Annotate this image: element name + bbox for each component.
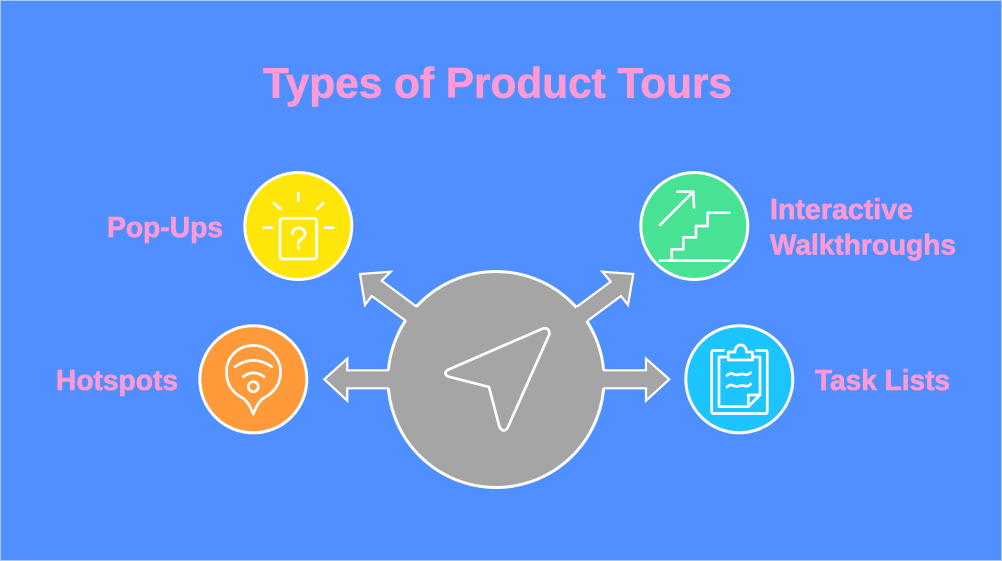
icon: wifi location pin [226,346,280,414]
label: interactive walkthroughs [770,194,956,262]
node: hotspots [200,326,307,433]
node: task lists [686,326,793,433]
node: pop-ups [245,172,352,280]
label: interactive walkthroughs: Walkthroughs [770,230,956,262]
arrow: to interactive walkthroughs [574,272,633,322]
label: pop-ups: Pop-Ups [107,212,223,244]
node: interactive walkthroughs [641,172,748,280]
arrow: to pop-ups [360,272,419,322]
title: Types of Product Tours [263,60,732,108]
label: interactive walkthroughs: Interactive [770,194,913,226]
icon: navigation pointer [445,328,550,431]
icon: pop-up with question mark [264,194,333,259]
arrow: to task lists [598,359,669,401]
central hub [388,272,604,488]
icon: clipboard [712,345,767,414]
arrow: to hotspots [324,359,394,401]
label: hotspots: Hotspots [56,365,178,397]
icon: stairs with arrow [660,192,729,261]
label: task lists: Task Lists [815,365,950,397]
